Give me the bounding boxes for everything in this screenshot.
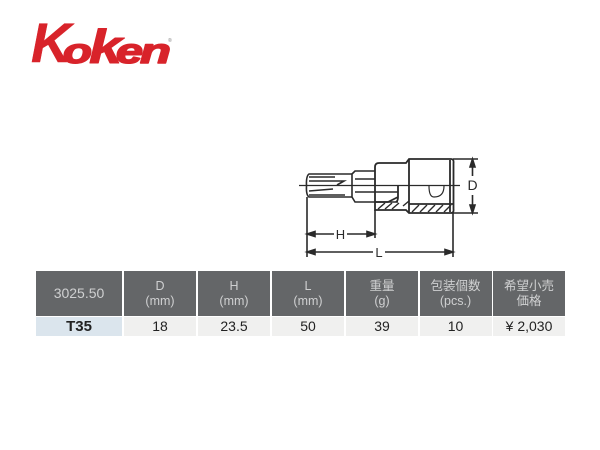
- logo: Koken: K: [31, 11, 75, 74]
- header: D: (mm): [145, 294, 175, 308]
- centre line: [299, 184, 460, 186]
- header: L: L: [305, 278, 311, 292]
- cell: L value: 50: [300, 318, 316, 334]
- cell: price value: [493, 317, 565, 336]
- header: price: 価格: [516, 294, 542, 308]
- cell: T35: [36, 317, 122, 336]
- dimension H: [307, 197, 375, 257]
- logo: Koken: o: [63, 32, 92, 71]
- logo: Koken: [31, 11, 172, 74]
- logo: Koken: n: [140, 32, 171, 71]
- dimension L: [307, 213, 453, 260]
- cell: L value: [272, 317, 344, 336]
- header: D: D: [155, 278, 165, 292]
- cell: H value: 23.5: [220, 318, 248, 334]
- header: price: 希望小売: [504, 278, 554, 292]
- header: package quantity: (pcs.): [440, 294, 471, 308]
- header: weight: (g): [374, 294, 390, 308]
- header: L: [272, 271, 344, 316]
- dimension D: D: [467, 177, 478, 193]
- header: model number: [36, 271, 122, 316]
- header: price: [493, 271, 565, 316]
- cell: weight value: 39: [374, 318, 390, 334]
- cell: price value: ¥ 2,030: [506, 318, 552, 334]
- logo: Koken: ®: [168, 37, 172, 44]
- header: D: [124, 271, 196, 316]
- cell: D value: [124, 317, 196, 336]
- cell: quantity value: [420, 317, 492, 336]
- socket body: [375, 159, 454, 213]
- dimension L: L: [375, 245, 383, 260]
- header: weight: [346, 271, 418, 316]
- header: H: (mm): [219, 294, 249, 308]
- cell: weight value: [346, 317, 418, 336]
- header: L: (mm): [293, 294, 323, 308]
- dimension D: [453, 159, 478, 213]
- header: package quantity: 包装個数: [430, 278, 480, 292]
- bit outline: [306, 171, 398, 202]
- cell: D value: 18: [152, 318, 168, 334]
- logo: Koken: e: [116, 32, 143, 71]
- cell: H value: [198, 317, 270, 336]
- header: model number: 3025.50: [54, 285, 104, 301]
- header: weight: 重量: [369, 278, 394, 292]
- header: H: H: [229, 278, 239, 292]
- header: H: [198, 271, 270, 316]
- logo: Koken: k: [89, 20, 126, 73]
- cell: T35: T35: [66, 318, 92, 335]
- cross hatching: [378, 201, 451, 212]
- cell: quantity value: 10: [448, 318, 463, 334]
- specification table: [36, 271, 565, 336]
- header: package quantity: [420, 271, 492, 316]
- dimension H: H: [336, 227, 345, 242]
